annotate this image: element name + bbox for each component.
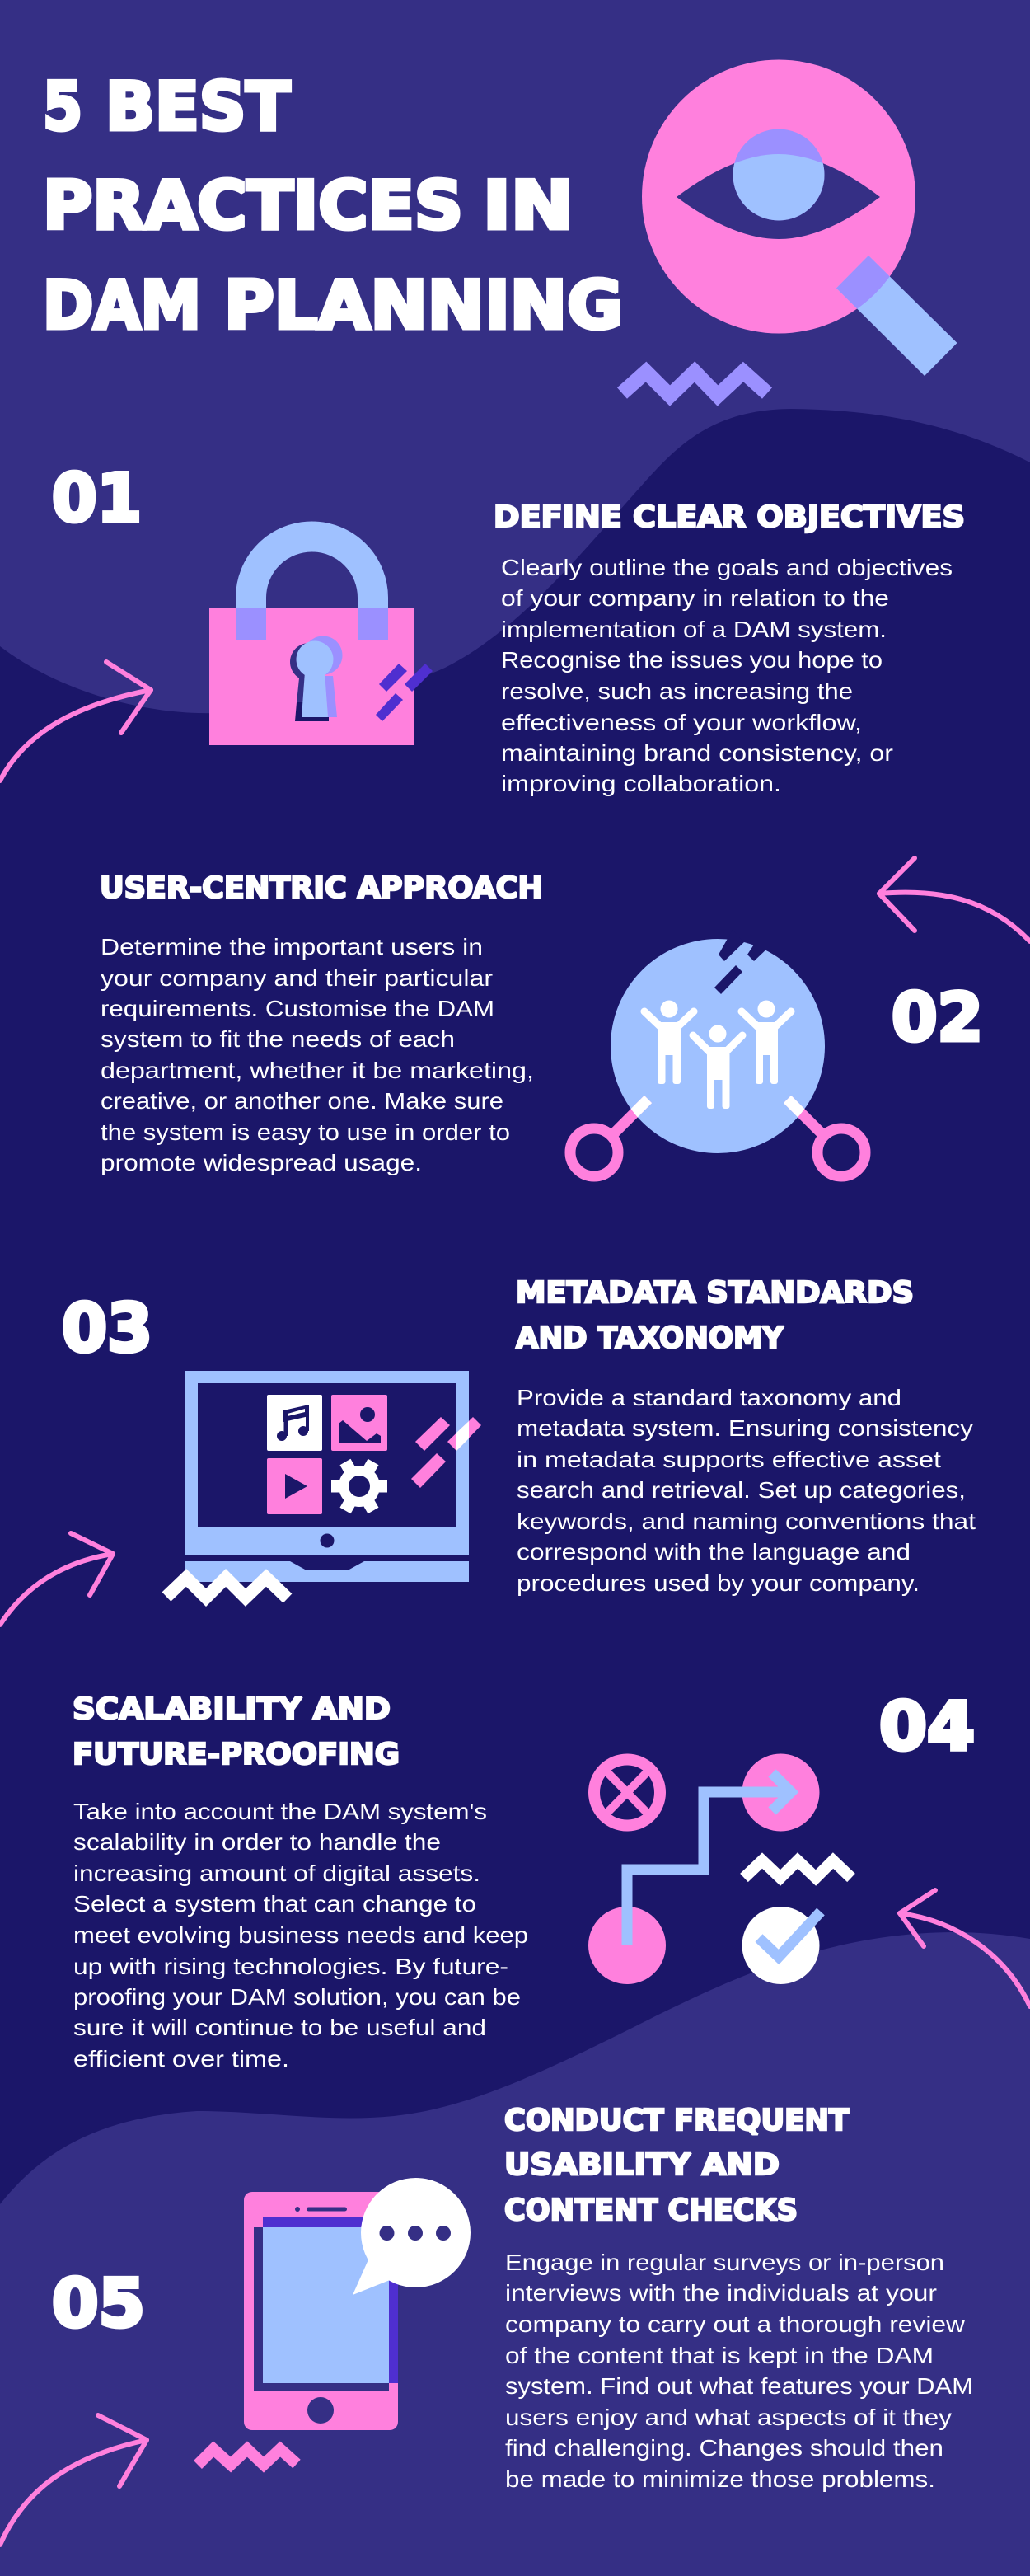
text block 5: system. Find out what features your DAM: [505, 2373, 973, 2399]
heading 3: METADATA STANDARDS: [516, 1276, 914, 1310]
text block 2: requirements. Customise the DAM: [101, 996, 494, 1021]
text block 1: maintaining brand consistency, or: [501, 740, 893, 766]
text block 5: [505, 2250, 973, 2492]
number 05: 05: [52, 2265, 145, 2342]
title: DAM: [43, 267, 201, 344]
text block 5: users enjoy and what aspects of it they: [505, 2405, 952, 2430]
icon: decision flow: [588, 1754, 821, 1984]
arrow 2: [879, 858, 1030, 941]
text block 4: sure it will continue to be useful and: [73, 2015, 486, 2040]
text block 2: system to fit the needs of each: [101, 1026, 455, 1052]
text block 1: Recognise the issues you hope to: [501, 647, 883, 673]
heading 5: CONTENT CHECKS: [504, 2194, 798, 2227]
text block 1: Clearly outline the goals and objectives: [501, 555, 953, 580]
text block 5: Engage in regular surveys or in-person: [505, 2250, 944, 2275]
text block 3: [517, 1385, 976, 1596]
text block 3: metadata system. Ensuring consistency: [517, 1415, 973, 1441]
heading 1: DEFINE CLEAR OBJECTIVES: [494, 500, 965, 534]
number 02: 02: [892, 979, 983, 1056]
text block 5: be made to minimize those problems.: [505, 2466, 935, 2492]
text block 2: the system is easy to use in order to: [101, 1119, 510, 1145]
text block 1: implementation of a DAM system.: [501, 617, 887, 642]
text block 4: [73, 1799, 528, 2072]
text block 2: [101, 934, 534, 1175]
title: [43, 68, 623, 344]
text block 4: Take into account the DAM system's: [73, 1799, 487, 1824]
arrow 1: [0, 662, 151, 781]
text block 1: resolve, such as increasing the: [501, 678, 853, 704]
heading 4: FUTURE-PROOFING: [73, 1738, 400, 1771]
heading 5: [504, 2104, 849, 2227]
heading 2: USER-CENTRIC APPROACH: [100, 871, 543, 905]
arrow 4: [900, 1890, 1030, 2006]
text block 2: department, whether it be marketing,: [101, 1058, 534, 1083]
text block 3: procedures used by your company.: [517, 1570, 920, 1596]
text block 2: promote widespread usage.: [101, 1150, 422, 1175]
heading 4: [73, 1692, 400, 1771]
number 04: 04: [879, 1688, 975, 1765]
number 01: 01: [52, 460, 142, 537]
icon: magnifier with eye: [642, 59, 957, 376]
zigzag purple: [622, 372, 767, 396]
text block 1: effectiveness of your workflow,: [501, 710, 862, 735]
text block 4: up with rising technologies. By future-: [73, 1954, 508, 1979]
text block 3: keywords, and naming conventions that: [517, 1509, 976, 1534]
text block 1: of your company in relation to the: [501, 585, 889, 611]
icon: padlock: [209, 537, 433, 745]
icon: monitor: [185, 1371, 481, 1582]
icon: team circle: [570, 930, 865, 1176]
background bottom wave: [0, 1932, 1030, 2576]
zigzag white small: [744, 1860, 851, 1878]
text block 4: efficient over time.: [73, 2046, 289, 2072]
text block 5: interviews with the individuals at your: [505, 2280, 937, 2306]
text block 1: [501, 555, 953, 796]
text block 4: increasing amount of digital assets.: [73, 1860, 480, 1886]
arrow 5: [0, 2415, 147, 2545]
text block 5: find challenging. Changes should then: [505, 2435, 943, 2461]
zigzag pink: [198, 2449, 297, 2465]
heading 5: CONDUCT FREQUENT: [504, 2104, 849, 2137]
title: PLANNING: [224, 267, 623, 344]
text block 1: improving collaboration.: [501, 771, 781, 796]
text block 3: search and retrieval. Set up categories,: [517, 1477, 966, 1503]
text block 3: Provide a standard taxonomy and: [517, 1385, 901, 1410]
arrow 3: [0, 1533, 113, 1625]
title: IN: [483, 167, 574, 244]
text block 3: correspond with the language and: [517, 1539, 911, 1565]
text block 2: creative, or another one. Make sure: [101, 1088, 503, 1114]
zigzag white: [166, 1578, 288, 1598]
heading 3: AND TAXONOMY: [516, 1321, 784, 1355]
heading 5: USABILITY AND: [504, 2148, 780, 2182]
title: BEST: [105, 68, 290, 145]
number 03: 03: [62, 1290, 152, 1367]
text block 5: company to carry out a thorough review: [505, 2311, 966, 2337]
text block 4: scalability in order to handle the: [73, 1829, 441, 1855]
title: PRACTICES: [43, 167, 463, 244]
text block 4: meet evolving business needs and keep: [73, 1922, 528, 1948]
text block 3: in metadata supports effective asset: [517, 1447, 941, 1472]
heading 3: [516, 1276, 914, 1355]
heading 4: SCALABILITY AND: [73, 1692, 391, 1726]
title: 5: [43, 68, 82, 145]
icon: phone with speech bubble: [244, 2178, 471, 2430]
text block 4: Select a system that can change to: [73, 1891, 476, 1917]
text block 2: your company and their particular: [101, 965, 493, 991]
text block 4: proofing your DAM solution, you can be: [73, 1984, 521, 2010]
text block 5: of the content that is kept in the DAM: [505, 2343, 934, 2368]
text block 2: Determine the important users in: [101, 934, 483, 960]
